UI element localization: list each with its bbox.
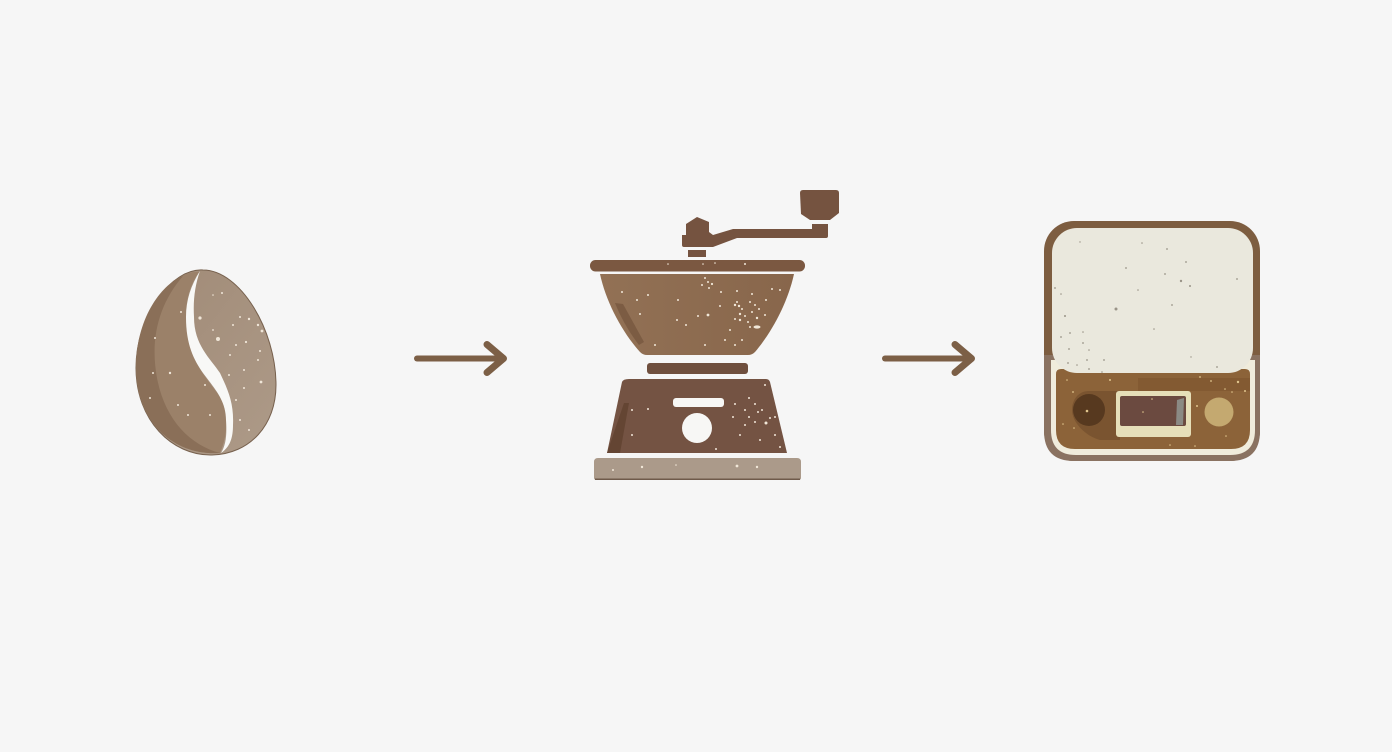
scale body panel bbox=[1056, 369, 1250, 449]
scale body shade bbox=[1138, 378, 1250, 391]
arrow: grinder to scale bbox=[885, 344, 972, 372]
grinder base shading bbox=[607, 403, 629, 453]
scale right button bbox=[1204, 398, 1234, 426]
grinder bowl bbox=[600, 274, 794, 355]
grinder neck bbox=[647, 363, 748, 374]
scale plate bbox=[1052, 228, 1253, 373]
grinder handle bbox=[682, 190, 839, 257]
bean speckles bbox=[149, 292, 263, 431]
scale outer shell bbox=[1044, 221, 1260, 461]
grinder bowl shading bbox=[615, 303, 644, 345]
grinder speckles bbox=[612, 262, 781, 471]
bean centre crease bbox=[186, 271, 233, 453]
bean left half bbox=[136, 272, 226, 453]
arrow: bean to grinder bbox=[417, 344, 504, 372]
grinder lid bbox=[590, 260, 805, 272]
scale body speckles bbox=[1062, 376, 1246, 447]
scale knob shadow bbox=[1072, 391, 1120, 440]
grinder slot bbox=[673, 398, 724, 407]
bean dark crescent bbox=[136, 276, 220, 453]
scale inner trim bbox=[1051, 360, 1255, 455]
scale display bezel bbox=[1116, 391, 1191, 437]
icon: coffee grinder bbox=[590, 190, 839, 480]
icon: kitchen scale bbox=[1044, 221, 1260, 461]
grinder foot bbox=[594, 458, 801, 480]
grinder base bbox=[607, 379, 787, 453]
icon: coffee bean bbox=[136, 270, 276, 455]
scale lower shell bbox=[1044, 355, 1260, 461]
scale plate speckles bbox=[1054, 241, 1238, 373]
scale left dial bbox=[1073, 394, 1105, 426]
scale display screen bbox=[1120, 396, 1186, 426]
grinder window bbox=[682, 413, 712, 443]
scale display glare bbox=[1176, 398, 1184, 425]
